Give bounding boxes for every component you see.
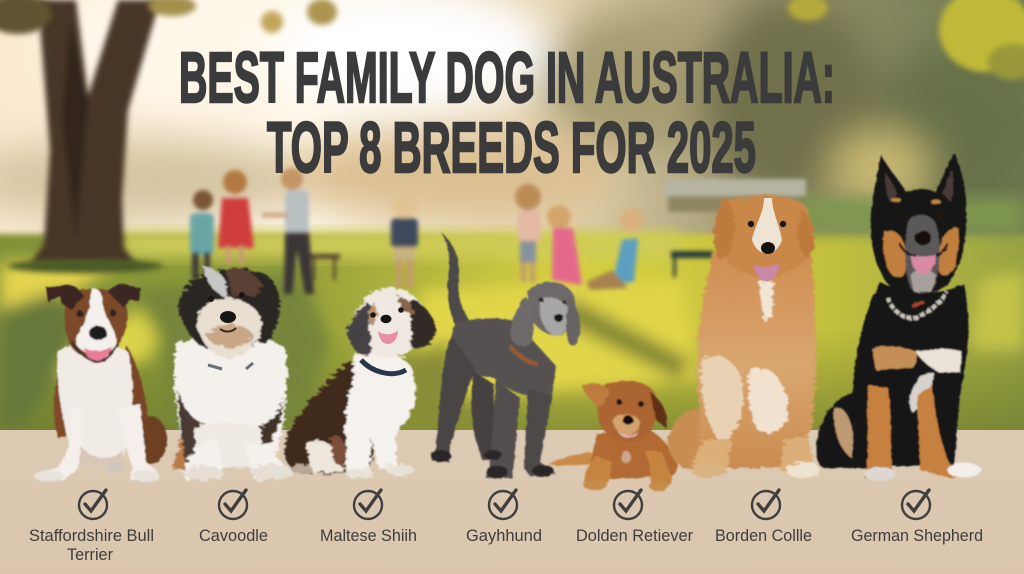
distant shed and benches xyxy=(306,179,806,280)
label: Staffordshire Bull Terrier: Staffordshire Bull xyxy=(29,527,154,545)
Maltese Shih Tzu face and collar xyxy=(361,307,406,374)
tree trunk xyxy=(30,0,160,264)
dog: Greyhound xyxy=(431,232,580,478)
label: Borden Collle: Borden Collle xyxy=(715,527,812,545)
Border Collie face xyxy=(748,198,786,281)
label: Staffordshire Bull Terrier xyxy=(29,527,154,564)
icon: check, Dolden Retiever xyxy=(614,490,642,519)
children playing xyxy=(190,168,644,294)
breed labels xyxy=(29,527,983,564)
icon: check, German Shepherd xyxy=(902,490,930,519)
dog: German Shepherd xyxy=(816,153,981,481)
label: Gayhhund: Gayhhund xyxy=(466,527,542,545)
icon: check, Borden Collle xyxy=(752,490,780,519)
check icons row xyxy=(79,490,930,519)
beige bottom band xyxy=(0,430,1024,574)
label: Staffordshire Bull Terrier: Terrier xyxy=(67,546,113,564)
Cavoodle face xyxy=(208,292,253,369)
dog: Staffordshire Bull Terrier xyxy=(34,284,167,482)
label: Maltese Shiih: Maltese Shiih xyxy=(320,527,417,545)
dog: Maltese Shih Tzu xyxy=(284,288,436,478)
icon: check, Gayhhund xyxy=(489,490,517,519)
label: Cavoodle: Cavoodle xyxy=(199,527,268,545)
dog: Cavoodle xyxy=(172,265,293,480)
dog: Golden Retriever, small and lying xyxy=(548,381,678,491)
title xyxy=(179,39,835,188)
label: Dolden Retiever: Dolden Retiever xyxy=(576,527,693,545)
foliage xyxy=(0,0,1024,80)
icon: check, Cavoodle xyxy=(219,490,247,519)
icon: check, Maltese Shiih xyxy=(354,490,382,519)
dog: Border Collie, golden coat xyxy=(668,195,820,478)
icon: check, Staffordshire Bull Terrier xyxy=(79,490,107,519)
background: sunlit park scene xyxy=(0,0,1024,454)
label: German Shepherd: German Shepherd xyxy=(851,527,983,545)
